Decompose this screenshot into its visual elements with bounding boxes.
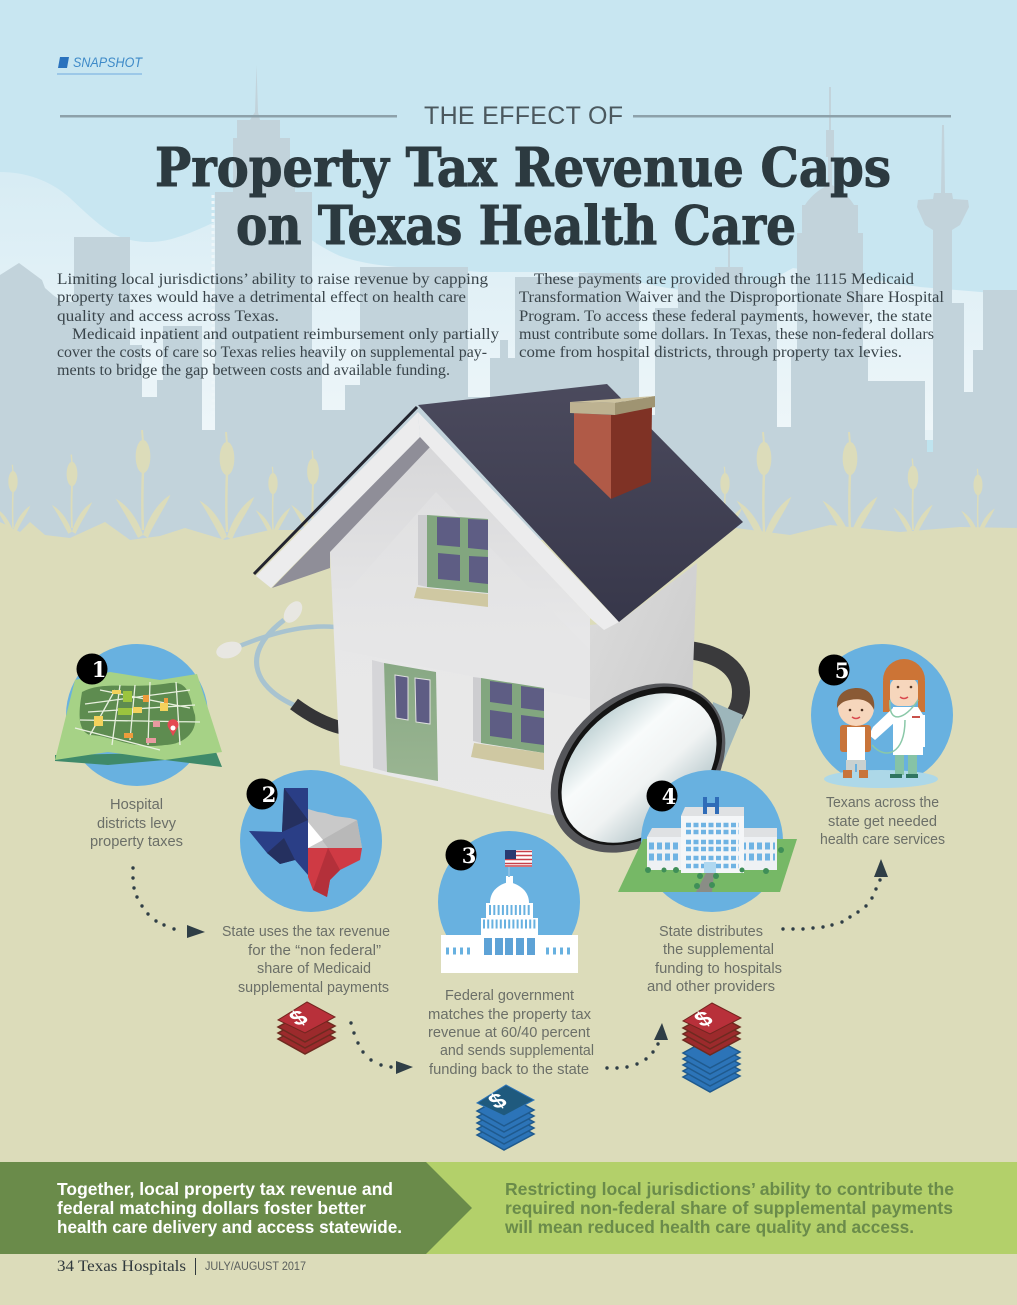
- upper window: [414, 515, 488, 607]
- fascia right: [418, 412, 619, 630]
- icon: red money stack: $: [284, 1006, 314, 1031]
- step 3 label: Federal government: [445, 988, 574, 1004]
- step 3 label: revenue at 60/40 percent: [428, 1025, 590, 1041]
- step 4 label: funding to hospitals: [655, 961, 782, 977]
- step 4 label: the supplemental: [663, 942, 774, 958]
- arrow from step 3 to step 4: [605, 1023, 668, 1070]
- banner: light right panel: required non-federal share of supplemental payments: [505, 1198, 953, 1218]
- intro text: left column: ments to bridge the gap between costs and available funding.: [57, 362, 450, 379]
- step 2 label: [222, 924, 390, 996]
- gable highlight: [340, 492, 590, 700]
- icon: doctor: [869, 659, 925, 778]
- banner: dark left arrow panel: Together, local property tax revenue and: [57, 1179, 393, 1199]
- badge 1: [76, 654, 108, 684]
- section tag: snapshot: SNAPSHOT: [73, 55, 144, 70]
- stethoscope chest piece: [517, 649, 759, 887]
- house side wall: [590, 563, 697, 810]
- banner: light right panel: will mean reduced health care quality and access.: [504, 1217, 914, 1237]
- step 3 label: [428, 988, 594, 1078]
- banner: light right panel: Restricting local jurisdictions’ ability to contribute the: [505, 1179, 954, 1199]
- intro text: right column: [519, 271, 944, 361]
- banner: dark left arrow panel: federal matching dollars foster better: [57, 1198, 366, 1218]
- intro text: right column: must contribute some dollars. In Texas, these non-federal dollars: [519, 326, 934, 343]
- step 2 label: supplemental payments: [238, 980, 389, 996]
- step 5 label: Texans across the: [826, 795, 939, 811]
- intro text: left column: cover the costs of care so Texas relies heavily on supplemental pay-: [57, 344, 487, 361]
- icon: blue money stack: $: [483, 1089, 513, 1114]
- icon: blue money stack: [477, 1085, 534, 1150]
- intro text: right column: These payments are provided through the 1115 Medicaid: [534, 271, 914, 288]
- banner: dark left arrow panel: [0, 1162, 472, 1254]
- badge 3: [446, 840, 476, 870]
- step 5 label: [820, 795, 945, 848]
- roof: [418, 384, 743, 622]
- badge 3: 3: [462, 843, 476, 868]
- step 1 label: [90, 797, 183, 850]
- step 2 label: State uses the tax revenue: [222, 924, 390, 940]
- intro text: left column: Limiting local jurisdictions’ ability to raise revenue by capping: [57, 271, 488, 288]
- chimney: [570, 396, 655, 499]
- step 3: capitol: [438, 831, 580, 973]
- step 3 label: funding back to the state: [429, 1062, 589, 1078]
- step 2: Texas: [240, 770, 382, 912]
- icon: mixed money stack: $: [689, 1007, 719, 1032]
- step 1 label: Hospital: [110, 797, 163, 813]
- house front wall: [330, 436, 590, 825]
- step 4 label: [647, 924, 782, 995]
- badge 4: 4: [662, 784, 676, 809]
- badge 2: [246, 778, 278, 810]
- icon: child: [837, 688, 874, 778]
- intro text: left column: quality and access across Texas.: [57, 308, 279, 325]
- step 3 label: and sends supplemental: [440, 1043, 594, 1059]
- icon: mixed money stack: [683, 1003, 741, 1092]
- icon: hospital building: [618, 797, 797, 892]
- fascia left: [256, 412, 420, 588]
- banner: dark left arrow panel: health care delivery and access statewide.: [57, 1217, 402, 1237]
- step 1 label: property taxes: [90, 834, 183, 850]
- arrow from step 2 to step 3: [349, 1021, 413, 1074]
- badge 1: 1: [92, 657, 106, 682]
- arrow from step 4 to step 5: [781, 859, 888, 931]
- step 1 label: districts levy: [97, 816, 177, 832]
- icon: folded map: [55, 672, 222, 767]
- icon: Texas flag map: [249, 788, 362, 897]
- intro text: left column: property taxes would have a detrimental effect on health care: [57, 289, 466, 306]
- footer: JULY/AUGUST 2017: [205, 1259, 306, 1273]
- title: Property Tax Revenue Caps: [155, 137, 891, 199]
- intro text: right column: Transformation Waiver and the Disproportionate Share Hospital: [519, 289, 944, 306]
- soffit: [272, 436, 430, 588]
- intro text: left column: [57, 271, 499, 379]
- step 4: hospital: [618, 770, 797, 912]
- step 5 label: health care services: [820, 832, 945, 848]
- icon: capitol building: [441, 876, 578, 973]
- step 4 label: State distributes: [659, 924, 763, 940]
- intro text: right column: Program. To access these federal payments, however, the state: [519, 308, 932, 325]
- footer: [57, 1258, 306, 1275]
- lower window: [471, 677, 544, 770]
- intro text: right column: come from hospital districts, through property tax levies.: [519, 344, 902, 361]
- step 2 label: share of Medicaid: [257, 961, 371, 977]
- title: [155, 137, 891, 257]
- banner: light right panel: [426, 1162, 1017, 1254]
- kicker: the effect of: THE EFFECT OF: [424, 102, 623, 130]
- step 2 label: for the “non federal”: [248, 943, 381, 959]
- icon: red money stack: [278, 1002, 335, 1054]
- badge 2: 2: [262, 782, 276, 807]
- badge 5: 5: [835, 658, 849, 683]
- step 4 label: and other providers: [647, 979, 775, 995]
- intro text: left column: Medicaid inpatient and outpatient reimbursement only partially: [72, 326, 499, 343]
- footer: 34 Texas Hospitals: [57, 1258, 186, 1275]
- door: [372, 660, 438, 781]
- roof dark edge: [254, 407, 417, 574]
- icon: flag: [505, 850, 532, 877]
- step 5 label: state get needed: [828, 814, 937, 830]
- arrow from step 1 to step 2: [131, 866, 205, 938]
- section tag: snapshot: [57, 55, 144, 75]
- title: on Texas Health Care: [236, 195, 796, 257]
- badge 4: [646, 780, 678, 812]
- badge 5: [818, 654, 850, 686]
- step 5: Texans: [811, 644, 953, 788]
- step 1: map: [55, 644, 222, 786]
- step 3 label: matches the property tax: [428, 1007, 592, 1023]
- house: [254, 384, 743, 825]
- stethoscope tubing behind the house: [214, 598, 741, 728]
